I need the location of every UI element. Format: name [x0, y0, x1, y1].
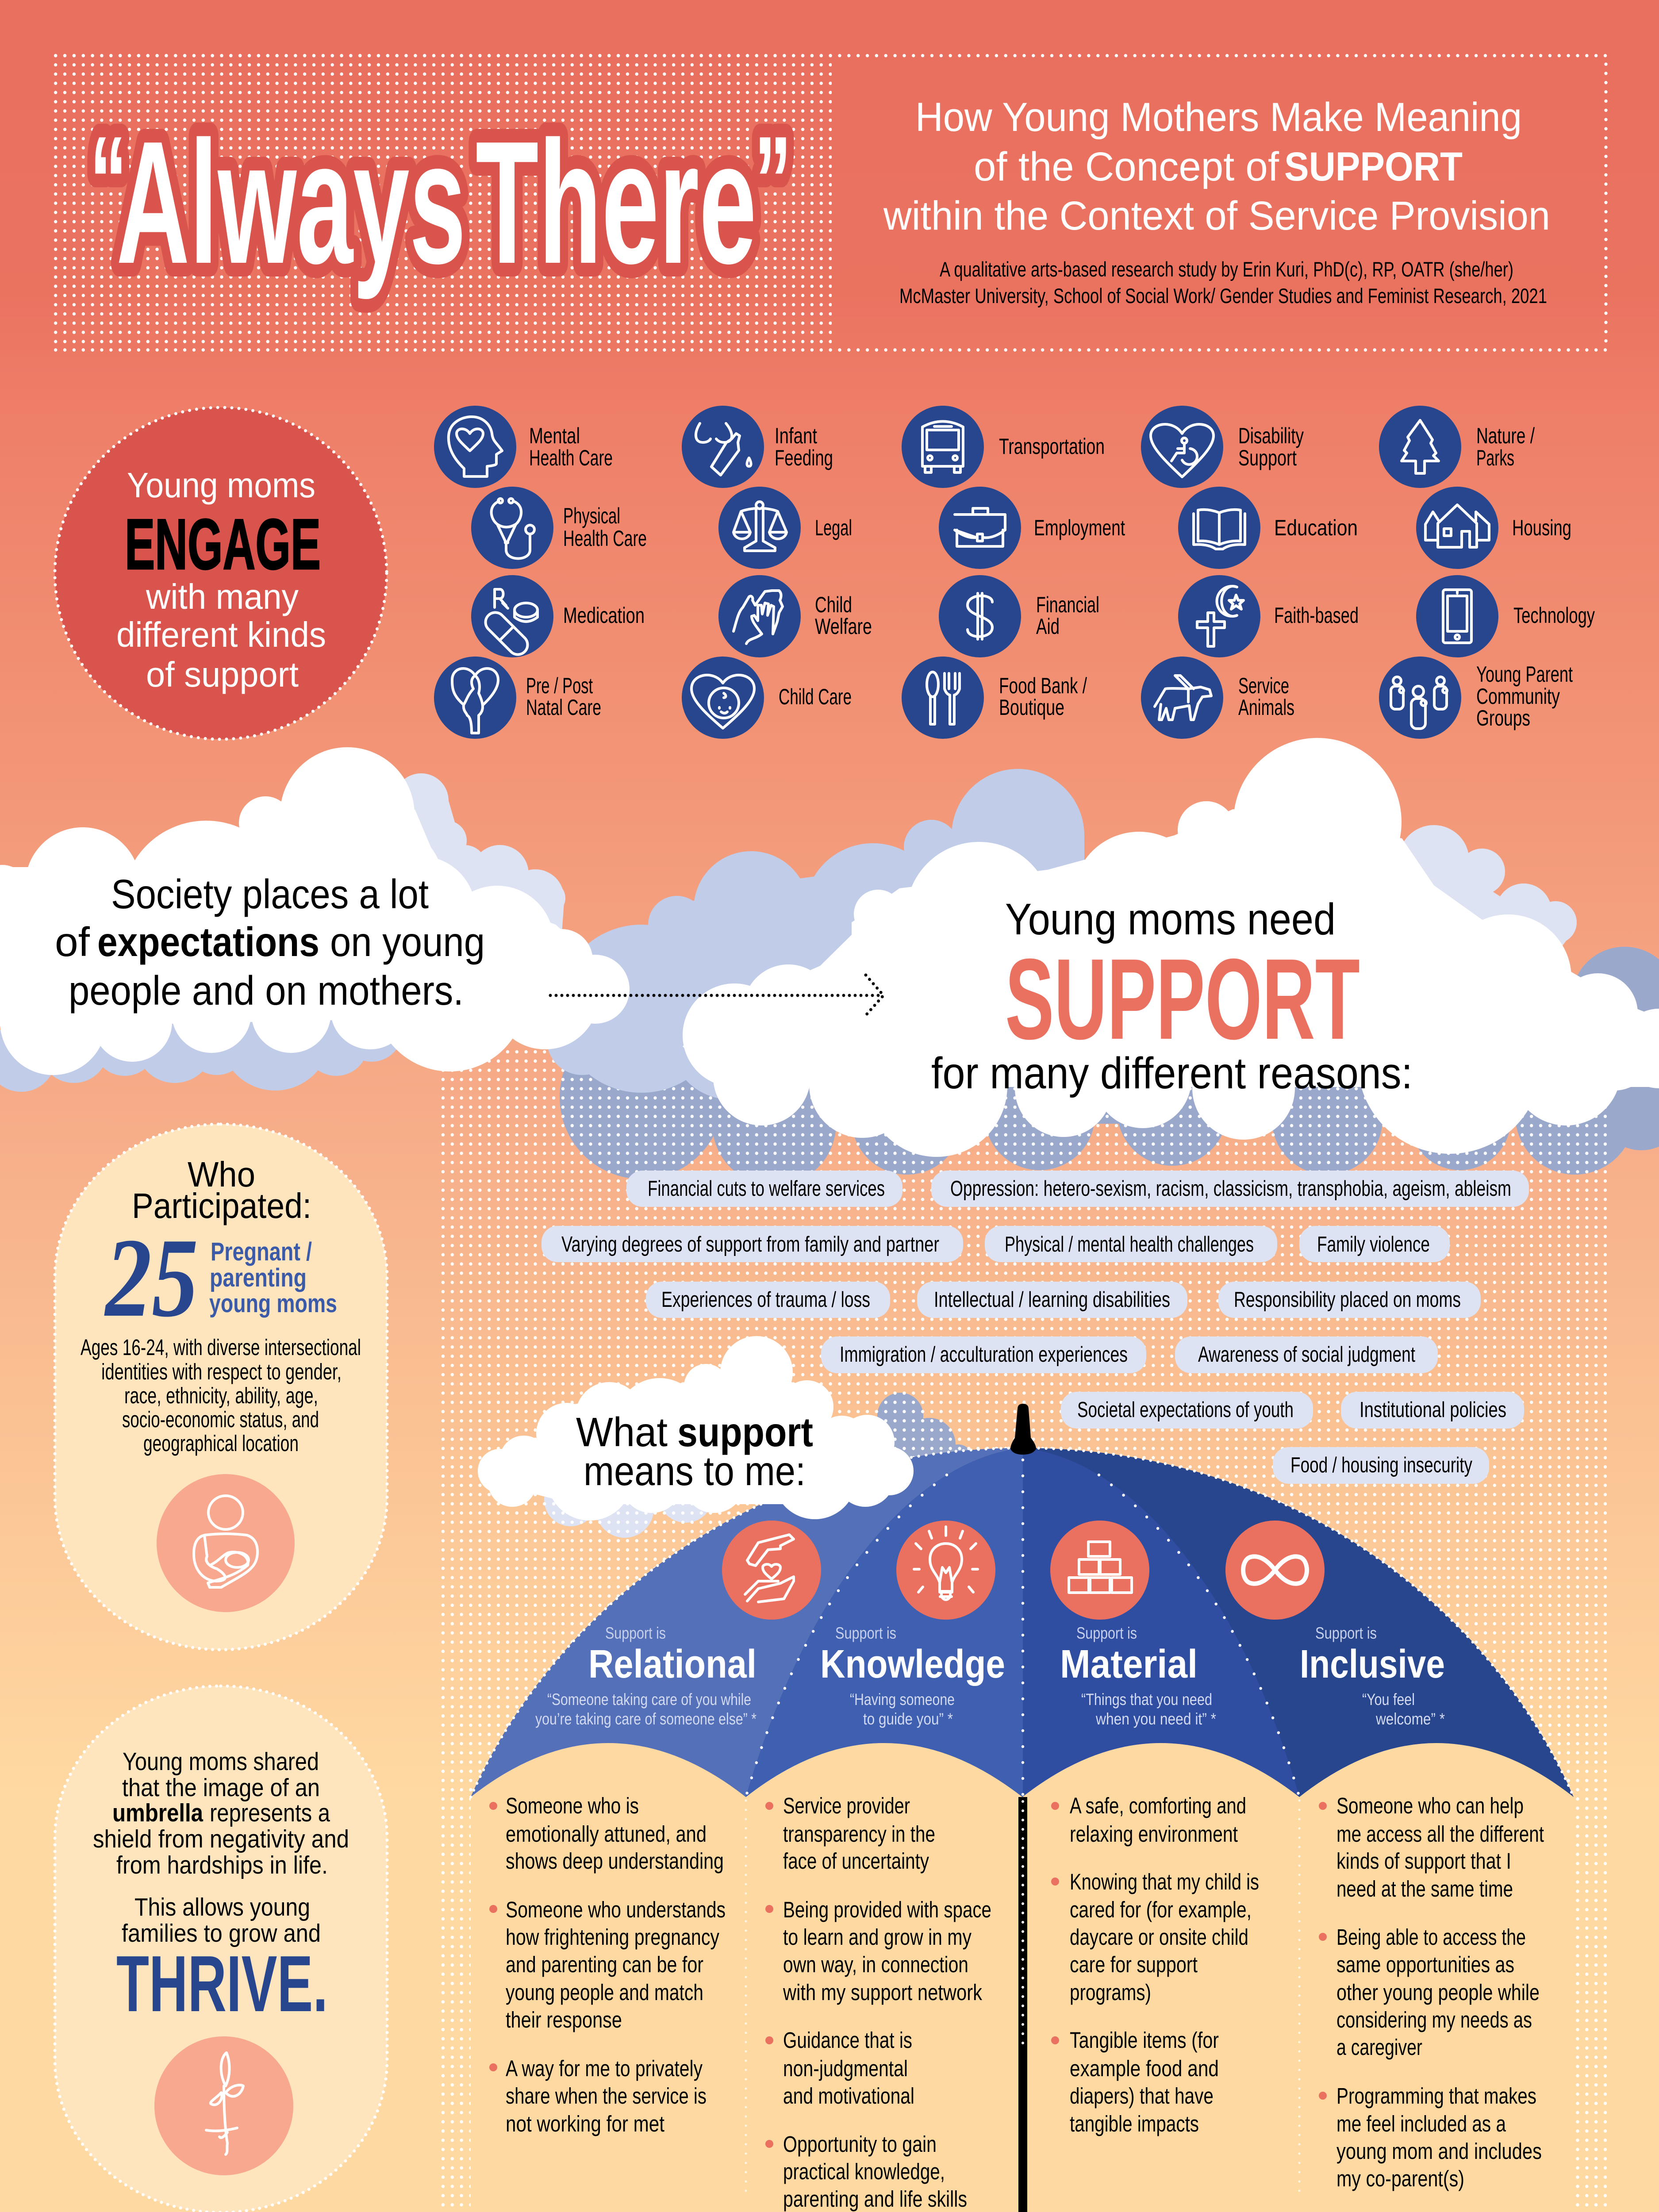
list: knowledge bullets: face of uncertainty: [783, 1848, 929, 1874]
pill: experiences of trauma: [646, 1282, 890, 1318]
panel: kinds of support icons: [434, 406, 1595, 739]
label: pre / post natal care: Pre / Post: [526, 673, 593, 698]
panel: young moms engage: Young moms: [127, 465, 315, 505]
list: knowledge bullets: parenting and life skills: [783, 2186, 967, 2212]
heading: young moms need: Young moms need: [1005, 895, 1336, 944]
column: inclusive: [1225, 1521, 1544, 2191]
list: material bullets: Tangible items (for: [1070, 2028, 1219, 2053]
label: child welfare: Welfare: [815, 614, 872, 639]
pill: responsibility: Responsibility placed on moms: [1234, 1288, 1461, 1312]
label: service animals: Service: [1238, 673, 1289, 698]
panel: young moms engage: [55, 407, 387, 739]
label: young parent community groups: Young Parent: [1476, 662, 1573, 687]
label: physical health care: [563, 503, 647, 551]
list: relational bullets: young people and match: [506, 1980, 703, 2005]
text: young moms shared: Young moms shared: [123, 1747, 319, 1776]
heading: who participated: Participated:: [132, 1186, 311, 1225]
cloud: pale right cloud: [1398, 825, 1577, 995]
pill: physical mental health: [985, 1226, 1277, 1262]
list: material bullets: diapers) that have: [1070, 2083, 1214, 2108]
umbrella shaft: [1018, 1797, 1027, 2212]
icon: physical health care: [471, 487, 553, 569]
icon: education: [1178, 487, 1260, 569]
icon: food bank / boutique: [902, 657, 984, 739]
list: inclusive bullets: a caregiver: [1336, 2035, 1422, 2060]
panel: who participated: [55, 1124, 387, 1650]
pill: physical mental health: Physical / mental health challenges: [1005, 1233, 1254, 1256]
text: support is relational: you’re taking care of someone else” *: [535, 1710, 757, 1728]
list: inclusive bullets: young mom and includes: [1336, 2139, 1542, 2164]
list: material bullets: care for support: [1070, 1952, 1198, 1977]
cloud: pale left cloud: [394, 773, 565, 933]
subtitle: of the Concept of: [974, 144, 1279, 189]
label: young parent community groups: [1476, 662, 1573, 730]
text: support is inclusive: Inclusive: [1300, 1642, 1445, 1686]
pill: experiences of trauma: Experiences of trauma / loss: [661, 1288, 870, 1312]
label: infant feeding: Feeding: [775, 445, 833, 470]
label: young parent community groups: Groups: [1476, 706, 1530, 730]
list: inclusive bullets: considering my needs as: [1336, 2007, 1532, 2032]
list: inclusive bullets: Being able to access the: [1336, 1924, 1526, 1950]
label: pre / post natal care: Natal Care: [526, 695, 601, 720]
text: support is relational: Relational: [588, 1642, 757, 1686]
label: disability support: [1238, 423, 1304, 470]
column: material: [1050, 1521, 1259, 2136]
text: support is knowledge: “Having someone: [850, 1690, 955, 1709]
icon: child care: [682, 657, 764, 739]
list: material bullets: A safe, comforting and: [1070, 1793, 1246, 1818]
list: relational bullets: not working for met: [506, 2111, 664, 2136]
column: relational: [489, 1521, 821, 2136]
icon: financial aid: [939, 575, 1021, 657]
icon: pre / post natal care: [434, 657, 516, 739]
heading: support: SUPPORT: [1005, 935, 1360, 1064]
list: material bullets: programs): [1070, 1980, 1151, 2005]
pill: awareness: [1175, 1336, 1438, 1373]
list: knowledge bullets: practical knowledge,: [783, 2159, 945, 2184]
text: society places expectations: of: [55, 919, 90, 965]
list: inclusive bullets: other young people while: [1336, 1980, 1540, 2005]
icon: blocks: [1050, 1521, 1149, 1620]
list: relational bullets: share when the service is: [506, 2083, 707, 2108]
text: ages description: Ages 16-24, with diverse intersectional: [81, 1335, 361, 1360]
label: service animals: Animals: [1238, 695, 1294, 720]
list: relational bullets: A way for me to privately: [506, 2056, 703, 2081]
list: inclusive bullets: same opportunities as: [1336, 1952, 1514, 1977]
subtitle: How Young Mothers Make Meaning: [915, 95, 1522, 140]
list: relational bullets: [489, 1793, 726, 2136]
icon: technology: [1416, 575, 1498, 657]
panel: umbrella meaning: [55, 1686, 387, 2212]
list: knowledge bullets: Opportunity to gain: [783, 2131, 937, 2157]
list: inclusive bullets: kinds of support that I: [1336, 1848, 1511, 1874]
label: disability support: Disability: [1238, 423, 1304, 448]
list: inclusive bullets: need at the same time: [1336, 1876, 1513, 1901]
pill: responsibility: [1218, 1282, 1481, 1318]
text: support is relational: Support is: [605, 1624, 666, 1642]
subtitle: within the Context of Service Provision: [883, 193, 1550, 238]
text: support is knowledge: to guide you” *: [863, 1710, 953, 1728]
list: inclusive bullets: [1319, 1793, 1544, 2191]
text: young moms shared: umbrella: [112, 1799, 204, 1827]
list: knowledge bullets: Service provider: [783, 1793, 910, 1818]
text: young moms shared: that the image of an: [122, 1774, 320, 1802]
text: ages description: identities with respect to gender,: [101, 1359, 342, 1384]
pill: societal expectations: Societal expectations of youth: [1077, 1398, 1294, 1422]
text: for many different reasons: for many different reasons:: [931, 1048, 1413, 1098]
text: ages description: socio-economic status, and: [122, 1407, 319, 1432]
label: food bank / boutique: Food Bank /: [999, 673, 1087, 698]
pill: intellectual learning: Intellectual / learning disabilities: [934, 1288, 1170, 1312]
text: support is inclusive: [1300, 1624, 1445, 1728]
subtitle: SUPPORT: [1284, 144, 1463, 189]
text: young moms shared: shield from negativity and: [93, 1825, 349, 1853]
heading: what support means to me: What: [576, 1409, 668, 1455]
icon: faith-based: [1178, 575, 1260, 657]
dot pattern field: [441, 1048, 1607, 2212]
text: support is knowledge: Knowledge: [820, 1642, 1005, 1686]
icon: infant feeding: [682, 406, 764, 488]
umbrella ferrule: [1010, 1404, 1036, 1455]
icon: service animals: [1141, 657, 1223, 739]
label: infant feeding: [775, 423, 833, 470]
dotted seams below canopy: [746, 1801, 1299, 2194]
arrow: dotted: [550, 975, 883, 1015]
label: financial aid: [1036, 592, 1099, 639]
list: inclusive bullets: Someone who can help: [1336, 1793, 1524, 1818]
pill: financial cuts: [626, 1171, 902, 1207]
heading: what support means to me: support: [677, 1409, 813, 1455]
icon: light bulb: [896, 1521, 995, 1620]
text: support is material: Support is: [1076, 1624, 1137, 1642]
title: “: [90, 110, 127, 253]
pill: varying degrees: Varying degrees of support from family and partner: [561, 1233, 939, 1256]
text: support is knowledge: [820, 1624, 1005, 1728]
icon: transportation: [902, 406, 984, 488]
subtitle: [883, 95, 1550, 238]
icon: medication: [471, 575, 553, 659]
text: society places expectations: on young: [330, 919, 485, 965]
pill: institutional policies: [1341, 1392, 1524, 1429]
pill: financial cuts: Financial cuts to welfare services: [648, 1177, 885, 1201]
area under umbrella: [471, 1743, 1574, 2212]
cloud: society expectations: [0, 747, 630, 1075]
text: ages description: race, ethnicity, ability, age,: [124, 1383, 318, 1408]
label: mental health care: Mental: [529, 423, 580, 448]
list: relational bullets: Someone who understands: [506, 1897, 726, 1922]
label: transportation: Transportation: [999, 434, 1105, 459]
label: mental health care: Health Care: [529, 445, 613, 470]
cloud: dark back cloud: [560, 947, 1659, 1186]
panel: young moms engage: with many: [146, 577, 299, 616]
label: food bank / boutique: Boutique: [999, 695, 1064, 720]
list: inclusive bullets: me access all the different: [1336, 1821, 1544, 1847]
text: ages description: geographical location: [143, 1431, 299, 1456]
label: physical health care: Physical: [563, 503, 620, 528]
pill: intellectual learning: [917, 1282, 1187, 1318]
label: child welfare: [815, 592, 872, 639]
label: young parent community groups: Community: [1476, 684, 1560, 709]
panel: young moms engage: different kinds: [116, 615, 326, 654]
icon: disability support: [1141, 406, 1223, 488]
heading: who participated: [132, 1155, 311, 1225]
label: medication: Medication: [563, 603, 645, 628]
pill: family violence: [1299, 1226, 1450, 1262]
title: Always: [116, 104, 466, 301]
text: society places expectations: people and on mothers.: [69, 968, 464, 1014]
text: support is relational: [535, 1624, 757, 1728]
reasons pills: [541, 1171, 1529, 1484]
label: faith-based: Faith-based: [1274, 603, 1359, 628]
cloud: blue fringe under left cloud: [0, 980, 403, 1092]
list: material bullets: daycare or onsite child: [1070, 1924, 1248, 1950]
stat label: pregnant parenting young moms: young moms: [209, 1289, 337, 1318]
icon: young parent community groups: [1379, 657, 1461, 739]
list: material bullets: cared for (for example,: [1070, 1897, 1252, 1922]
list: material bullets: tangible impacts: [1070, 2111, 1199, 2136]
label: nature parks: Nature /: [1476, 423, 1535, 448]
label: financial aid: Aid: [1036, 614, 1060, 639]
label: child care: Child Care: [779, 684, 852, 709]
label: nature parks: [1476, 423, 1535, 470]
umbrella: [471, 1404, 1574, 2212]
icon: child welfare: [718, 575, 801, 657]
list: material bullets: example food and: [1070, 2056, 1219, 2081]
list: inclusive bullets: my co-parent(s): [1336, 2166, 1464, 2191]
label: infant feeding: Infant: [775, 423, 817, 448]
list: knowledge bullets: transparency in the: [783, 1821, 935, 1847]
list: knowledge bullets: with my support network: [783, 1980, 982, 2005]
stat: 25: 25: [104, 1215, 198, 1340]
text: ages description: [81, 1335, 361, 1456]
panel: young moms engage: ENGAGE: [125, 504, 321, 584]
icon: mother holding baby: [157, 1474, 295, 1612]
list: relational bullets: emotionally attuned, and: [506, 1821, 707, 1847]
heading: what support means to me: [576, 1409, 813, 1494]
label: housing: Housing: [1512, 515, 1571, 540]
text: young moms shared: This allows young: [134, 1893, 310, 1921]
umbrella canopy: [471, 1448, 1574, 1801]
heading: thrive: THRIVE.: [116, 1939, 328, 2028]
icon: legal: [718, 487, 801, 569]
heading: who participated: Who: [188, 1155, 255, 1194]
title: ”: [754, 110, 791, 253]
pill: family violence: Family violence: [1317, 1233, 1430, 1256]
pill: immigration: Immigration / acculturation experiences: [840, 1343, 1128, 1367]
text: support is material: Material: [1060, 1642, 1198, 1686]
cloud: young moms need support: [683, 738, 1659, 1157]
label: food bank / boutique: [999, 673, 1087, 720]
heading: what support means to me: means to me:: [584, 1448, 806, 1494]
header panel: [53, 53, 1606, 350]
list: relational bullets: shows deep understanding: [506, 1848, 724, 1874]
list: knowledge bullets: [765, 1793, 991, 2212]
text: society places expectations: Society places a lot: [111, 871, 429, 917]
label: legal: Legal: [815, 515, 852, 540]
text: support is material: when you need it” *: [1095, 1710, 1216, 1728]
pill: societal expectations: [1061, 1392, 1313, 1429]
list: inclusive bullets: Programming that makes: [1336, 2083, 1536, 2108]
list: knowledge bullets: non-judgmental: [783, 2056, 908, 2081]
list: knowledge bullets: Being provided with space: [783, 1897, 991, 1922]
label: technology: Technology: [1513, 603, 1595, 628]
list: knowledge bullets: Guidance that is: [783, 2028, 912, 2053]
label: financial aid: Financial: [1036, 592, 1099, 617]
pill: institutional policies: Institutional policies: [1359, 1398, 1506, 1422]
icon: infinity: [1225, 1521, 1325, 1620]
label: disability support: Support: [1238, 445, 1297, 470]
label: physical health care: Health Care: [563, 526, 647, 551]
pill: varying degrees: [541, 1226, 963, 1262]
list: knowledge bullets: and motivational: [783, 2083, 914, 2108]
cloud: small back clouds behind what support: [544, 1393, 973, 1538]
label: mental health care: [529, 423, 613, 470]
cloud: what support means to me: [478, 1336, 914, 1521]
list: knowledge bullets: own way, in connection: [783, 1952, 968, 1977]
text: young moms shared: families to grow and: [122, 1919, 321, 1947]
title: There: [476, 104, 757, 300]
text: support is knowledge: Support is: [835, 1624, 896, 1642]
label: service animals: [1238, 673, 1294, 720]
text: young moms shared: [93, 1747, 349, 1947]
stat label: pregnant parenting young moms: Pregnant /: [211, 1237, 312, 1266]
list: knowledge bullets: to learn and grow in my: [783, 1924, 972, 1950]
column: knowledge: [765, 1521, 1005, 2212]
label: nature parks: Parks: [1476, 445, 1514, 470]
icon: mental health care: [434, 406, 516, 488]
stat label: pregnant parenting young moms: parenting: [210, 1263, 307, 1292]
icon: hands and heart: [722, 1521, 821, 1620]
pill: awareness: Awareness of social judgment: [1198, 1343, 1415, 1367]
text: society places expectations: [55, 871, 485, 1014]
text: support is material: [1060, 1624, 1216, 1728]
pill: food housing: [1273, 1447, 1489, 1484]
list: inclusive bullets: me feel included as a: [1336, 2111, 1506, 2136]
list: relational bullets: their response: [506, 2007, 622, 2032]
panel: young moms engage: of support: [146, 655, 299, 694]
pill: immigration: [821, 1336, 1146, 1373]
authorship: [899, 257, 1547, 307]
text: support is inclusive: “You feel: [1362, 1690, 1415, 1709]
label: child welfare: Child: [815, 592, 852, 617]
list: material bullets: [1051, 1793, 1259, 2136]
icon: nature parks: [1379, 406, 1461, 488]
icon: sprout: [154, 2036, 293, 2175]
label: employment: Employment: [1034, 515, 1125, 540]
canopy seams: [471, 1448, 1574, 1797]
list: material bullets: Knowing that my child is: [1070, 1869, 1259, 1894]
text: society places expectations: expectations: [97, 919, 319, 965]
pill: food housing: Food / housing insecurity: [1290, 1453, 1472, 1477]
cloud: blue middle cloud: [547, 769, 1084, 1099]
list: relational bullets: Someone who is: [506, 1793, 639, 1818]
list: relational bullets: and parenting can be for: [506, 1952, 703, 1977]
list: material bullets: relaxing environment: [1070, 1821, 1238, 1847]
text: support is relational: “Someone taking care of you while: [547, 1690, 751, 1709]
text: support is inclusive: Support is: [1315, 1624, 1377, 1642]
stat label: pregnant parenting young moms: [209, 1237, 337, 1318]
icon: employment: [939, 487, 1021, 569]
list: relational bullets: how frightening pregnancy: [506, 1924, 719, 1950]
text: support is inclusive: welcome” *: [1375, 1710, 1445, 1728]
text: support is material: “Things that you need: [1081, 1690, 1212, 1709]
pill: oppression: [931, 1171, 1529, 1207]
label: education: Education: [1274, 515, 1358, 540]
text: young moms shared: represents a: [210, 1799, 330, 1827]
label: pre / post natal care: [526, 673, 601, 720]
icon: housing: [1416, 487, 1498, 569]
text: young moms shared: from hardships in life.: [116, 1851, 328, 1879]
